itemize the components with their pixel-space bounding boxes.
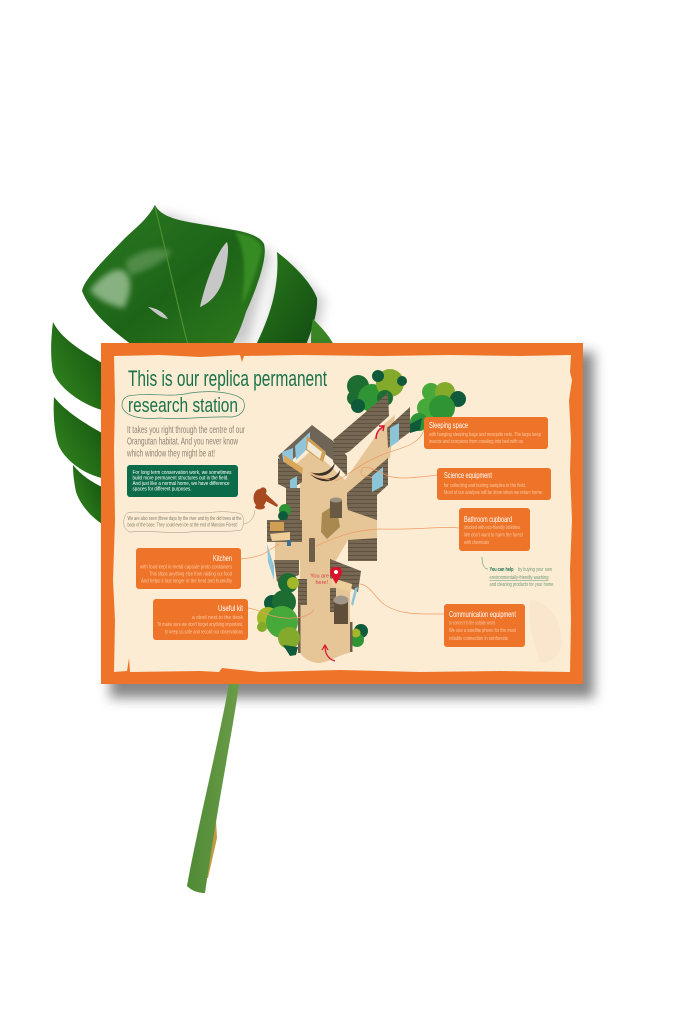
stem sliver (205, 803, 217, 878)
window: room lower (290, 476, 297, 490)
panel: communication equipment: reliable connection in rainforests (449, 636, 508, 642)
title highlight outline (122, 392, 244, 419)
callout: speech bubble: We are also seen (three days by the river and by the old trees at the (128, 516, 242, 522)
callout: green box: And just like a normal home, we have difference (132, 481, 230, 487)
callout: green box: For long term conservation work, we sometimes (132, 470, 232, 476)
window: upper right (390, 423, 399, 447)
panel: science equipment: Science equipment (444, 471, 493, 480)
panel: kitchen (136, 548, 241, 589)
window: middle (372, 467, 383, 492)
leaf highlight: shiny left (90, 270, 130, 308)
leaf lobe: main (82, 205, 265, 345)
window: comms (351, 587, 358, 606)
room: back walls (278, 425, 333, 466)
wall: comms hut (330, 559, 361, 592)
panel: kitchen: And helps it last longer in the heat and humidity (141, 578, 232, 584)
leaf lobe: middle left (54, 397, 102, 478)
callout: you can help: and cleaning products for your home (490, 582, 554, 588)
furniture: room bench (284, 455, 303, 474)
panel: useful kit: to keep us safe and record our observations (165, 630, 243, 636)
panel: communication equipment: We use a satellite phone for the most (449, 628, 516, 634)
bush: small (278, 504, 291, 521)
wall: room right (333, 441, 347, 476)
furniture: crate and drum (321, 498, 342, 539)
room: windows (282, 432, 310, 467)
furniture: kitchen shelf (270, 522, 284, 531)
furniture: bench partition (309, 538, 315, 562)
wall: upper right (387, 407, 410, 448)
wall: diagonal middle (347, 458, 388, 520)
icon: map pin (330, 567, 342, 584)
panel: bathroom cupboard: Bathroom cupboard (464, 515, 512, 524)
panel: sleeping space: insects and scorpions from crawling into bed with us (429, 439, 523, 445)
wall: kitchen lower (274, 560, 299, 582)
callout: you can help: environmentally-friendly washing (490, 575, 549, 581)
tree: top centre (347, 369, 407, 413)
leaf highlight: upper (125, 249, 172, 276)
wall: corridor edge (298, 605, 300, 653)
icon: orangutan (254, 487, 278, 510)
leaf lobe: small right (311, 319, 334, 345)
panel: bathroom cupboard: We don't want to harm the forest (464, 532, 523, 538)
stem (187, 684, 239, 893)
callout: you can help: by buying your own (518, 567, 552, 573)
furniture: tree stump (334, 596, 348, 624)
intro text: It takes you right through the centre of our (127, 425, 245, 436)
intro text (126, 425, 245, 460)
card shadow (110, 352, 594, 698)
callout: speech bubble: back of the base. They could even be at the end of Mansion Forest! (128, 522, 238, 528)
label: you are here: here! (315, 580, 328, 586)
furniture: room shelf (306, 436, 326, 462)
furniture: shelf windows (307, 441, 322, 459)
arrow: entrance red (322, 645, 335, 661)
panel: bathroom cupboard: stocked with eco-friendly toiletries (464, 525, 520, 531)
wall: comms lower (330, 588, 336, 612)
panel: poster (101, 343, 583, 684)
title line 1: This is our replica permanent (128, 366, 327, 391)
wall: corridor lower left (298, 579, 307, 605)
panel: science equipment (437, 468, 551, 500)
panel: kitchen: Kitchen (213, 554, 232, 563)
leaf highlight: right edge (235, 232, 262, 305)
callout: green box (127, 465, 238, 497)
panel: sleeping space: Sleeping space (429, 421, 468, 430)
furniture: comms desk (332, 578, 352, 592)
wall: kitchen (267, 520, 302, 542)
furniture: kitchen desk (270, 532, 290, 541)
leaf lobe: lower left (73, 465, 102, 524)
label: you are here (310, 574, 329, 586)
hammock: upper (310, 462, 335, 476)
panel: communication equipment (444, 604, 525, 647)
panel: science equipment: Most of our analysis will be done when we return home. (444, 490, 543, 496)
wall: corridor left (286, 488, 300, 522)
panel: kitchen: with food kept in metal capsule proto containers (140, 564, 232, 570)
wall: upper long (333, 393, 389, 455)
title (122, 366, 327, 419)
leaf shadow (136, 212, 324, 345)
arrow: top red (376, 426, 384, 439)
window: kitchen (267, 544, 274, 580)
furniture: kitchen items (287, 540, 291, 546)
label: you are here: You are (310, 574, 329, 580)
callout: green box: spaces for different purposes. (132, 486, 192, 492)
poster orange frame (101, 343, 583, 684)
panel: science equipment: for collecting and testing samples in the field. (444, 483, 526, 489)
station floor (275, 415, 395, 663)
faint leaf watermark (529, 600, 562, 663)
illustration: research station (257, 369, 466, 663)
panel: bathroom cupboard: with chemicals (464, 540, 489, 546)
panel: sleeping space: with hanging sleeping bags and mosquito nets. The tarps keep (429, 432, 541, 438)
wall: entrance right edge (350, 622, 352, 652)
leaf midrib (155, 207, 188, 345)
panel: useful kit: Useful kit (218, 604, 244, 613)
panel: sleeping space (424, 417, 548, 449)
intro text: which window they might be at! (126, 448, 215, 460)
icon: monstera leaf (51, 205, 334, 524)
panel: kitchen: This stops anything else from raiding our food (149, 572, 232, 578)
panel: bathroom cupboard (459, 508, 530, 551)
intro text: Orangutan habitat. And you never know (127, 436, 238, 448)
icon: leaf stem (187, 684, 239, 893)
panel: useful kit: To make sure we don't forget anything important, (157, 622, 243, 628)
room: floor patch (296, 450, 335, 490)
callout: green box: build more permanent structures out in the field. (132, 476, 228, 482)
title line 2: research station (128, 395, 238, 417)
wall: right centre block (348, 538, 377, 561)
leaf lobe: upper right (256, 252, 317, 345)
panel: communication equipment: to connect to the outside world (449, 620, 495, 626)
tree: bottom left (257, 573, 300, 656)
panel: communication equipment: Communication equipment (449, 610, 517, 619)
callout: you can help (482, 557, 554, 588)
connector lines (241, 430, 459, 618)
tree: top right (410, 382, 466, 433)
callout: you can help: You can help (490, 567, 514, 573)
panel: useful kit (153, 599, 248, 640)
poster cream paper (113, 355, 572, 672)
callout: speech bubble (124, 510, 255, 533)
tree: bottom right (350, 624, 368, 647)
leaf lobe: upper left (51, 322, 102, 410)
wall: room left (278, 458, 302, 490)
panel: useful kit: a stool next to the desk (192, 615, 243, 621)
hammock: lower (310, 470, 340, 481)
